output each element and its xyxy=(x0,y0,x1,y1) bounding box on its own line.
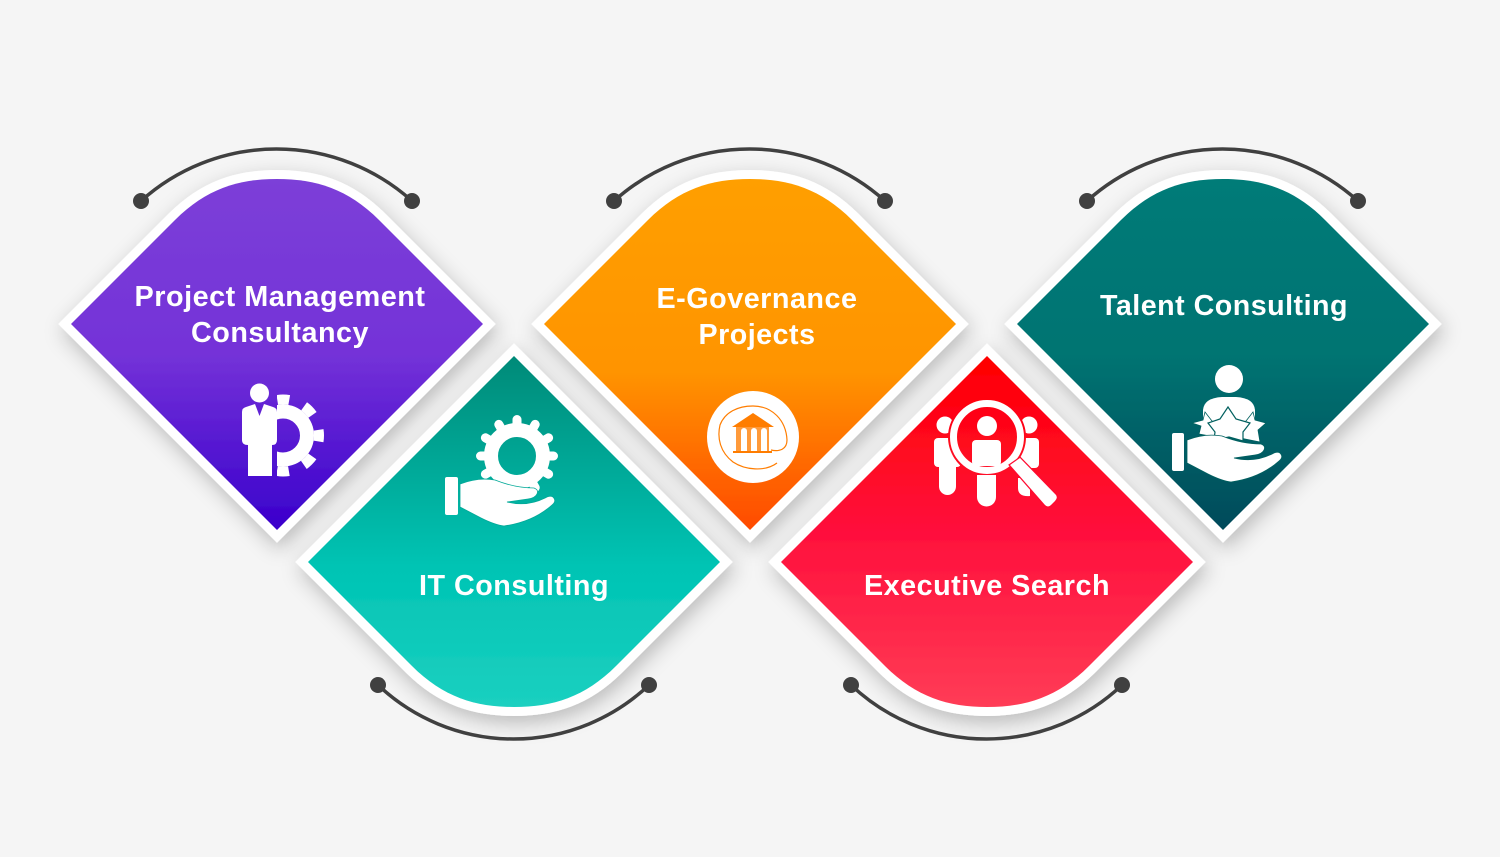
icon: government building in e-circle xyxy=(707,391,799,483)
heading line 2: Consultancy xyxy=(191,317,369,349)
diamond: orange xyxy=(544,179,956,530)
icon: hand holding gear xyxy=(445,420,555,526)
panel: Project Management Consultancy xyxy=(71,149,483,530)
panel: Executive Search xyxy=(781,356,1193,739)
diamond: red xyxy=(781,356,1193,707)
heading: Executive Search: Executive Search xyxy=(864,570,1110,602)
arc connector: teal xyxy=(1079,149,1366,209)
panel: IT Consulting xyxy=(308,356,720,739)
diamond: teal xyxy=(1017,179,1429,530)
heading: E-Governance: E-Governance xyxy=(656,283,858,315)
diamond: purple xyxy=(71,179,483,530)
icon: magnifier over people xyxy=(934,404,1057,506)
heading: Talent Consulting: Talent Consulting xyxy=(1100,290,1348,322)
arc connector: purple xyxy=(133,149,420,209)
panel: E-Governance Projects xyxy=(544,149,956,530)
diamond: green xyxy=(308,356,720,707)
heading line 2: Projects xyxy=(698,319,816,351)
arc connector: red xyxy=(843,677,1130,739)
arc connector: orange xyxy=(606,149,893,209)
heading: IT Consulting: IT Consulting xyxy=(419,570,609,602)
icon: businessman with gear xyxy=(242,384,319,476)
heading: Project Management Consultancy: Project Management xyxy=(134,281,426,313)
icon: hand holding person and stars xyxy=(1172,365,1282,482)
panel: Talent Consulting xyxy=(1017,149,1429,530)
arc connector: green xyxy=(370,677,657,739)
